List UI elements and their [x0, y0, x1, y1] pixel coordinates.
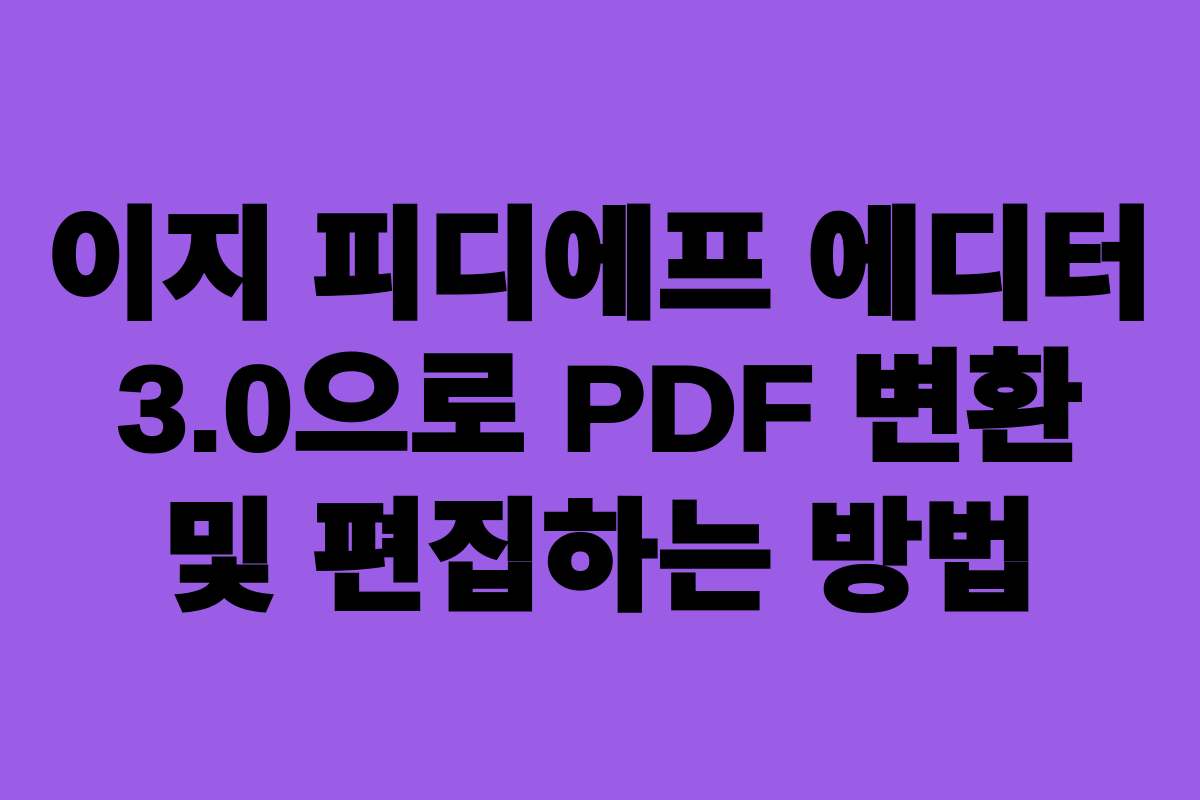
- title: 및 편집하는 방법: [162, 491, 1038, 625]
- title: [47, 199, 1153, 625]
- title: 3.0으로 PDF 변환: [117, 342, 1083, 476]
- title: 이지 피디에프 에디터: [47, 199, 1153, 333]
